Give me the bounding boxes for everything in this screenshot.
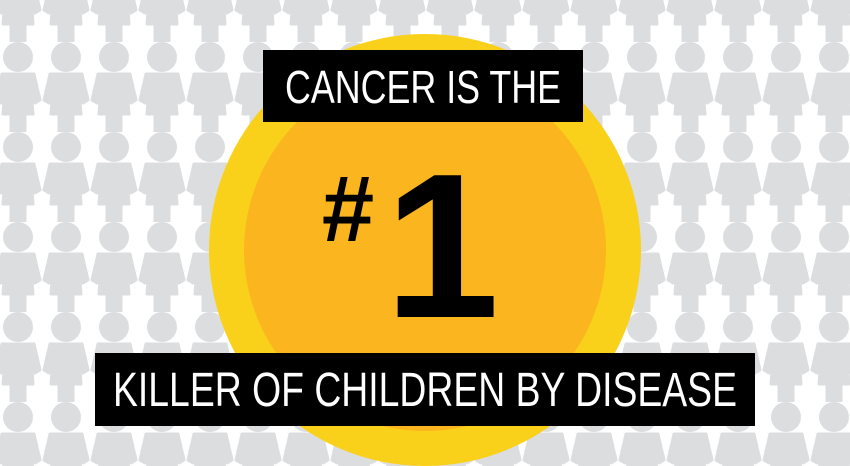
big number: #1 bbox=[322, 131, 499, 361]
big number: #1: 1 bbox=[385, 131, 499, 361]
label: cancer is the bbox=[263, 50, 583, 122]
big number: #1: # bbox=[322, 156, 374, 261]
label: cancer is the: CANCER IS THE bbox=[285, 61, 561, 113]
outer yellow circle bbox=[209, 34, 641, 466]
label: killer of children by disease bbox=[95, 353, 755, 426]
inner orange circle bbox=[244, 69, 606, 431]
